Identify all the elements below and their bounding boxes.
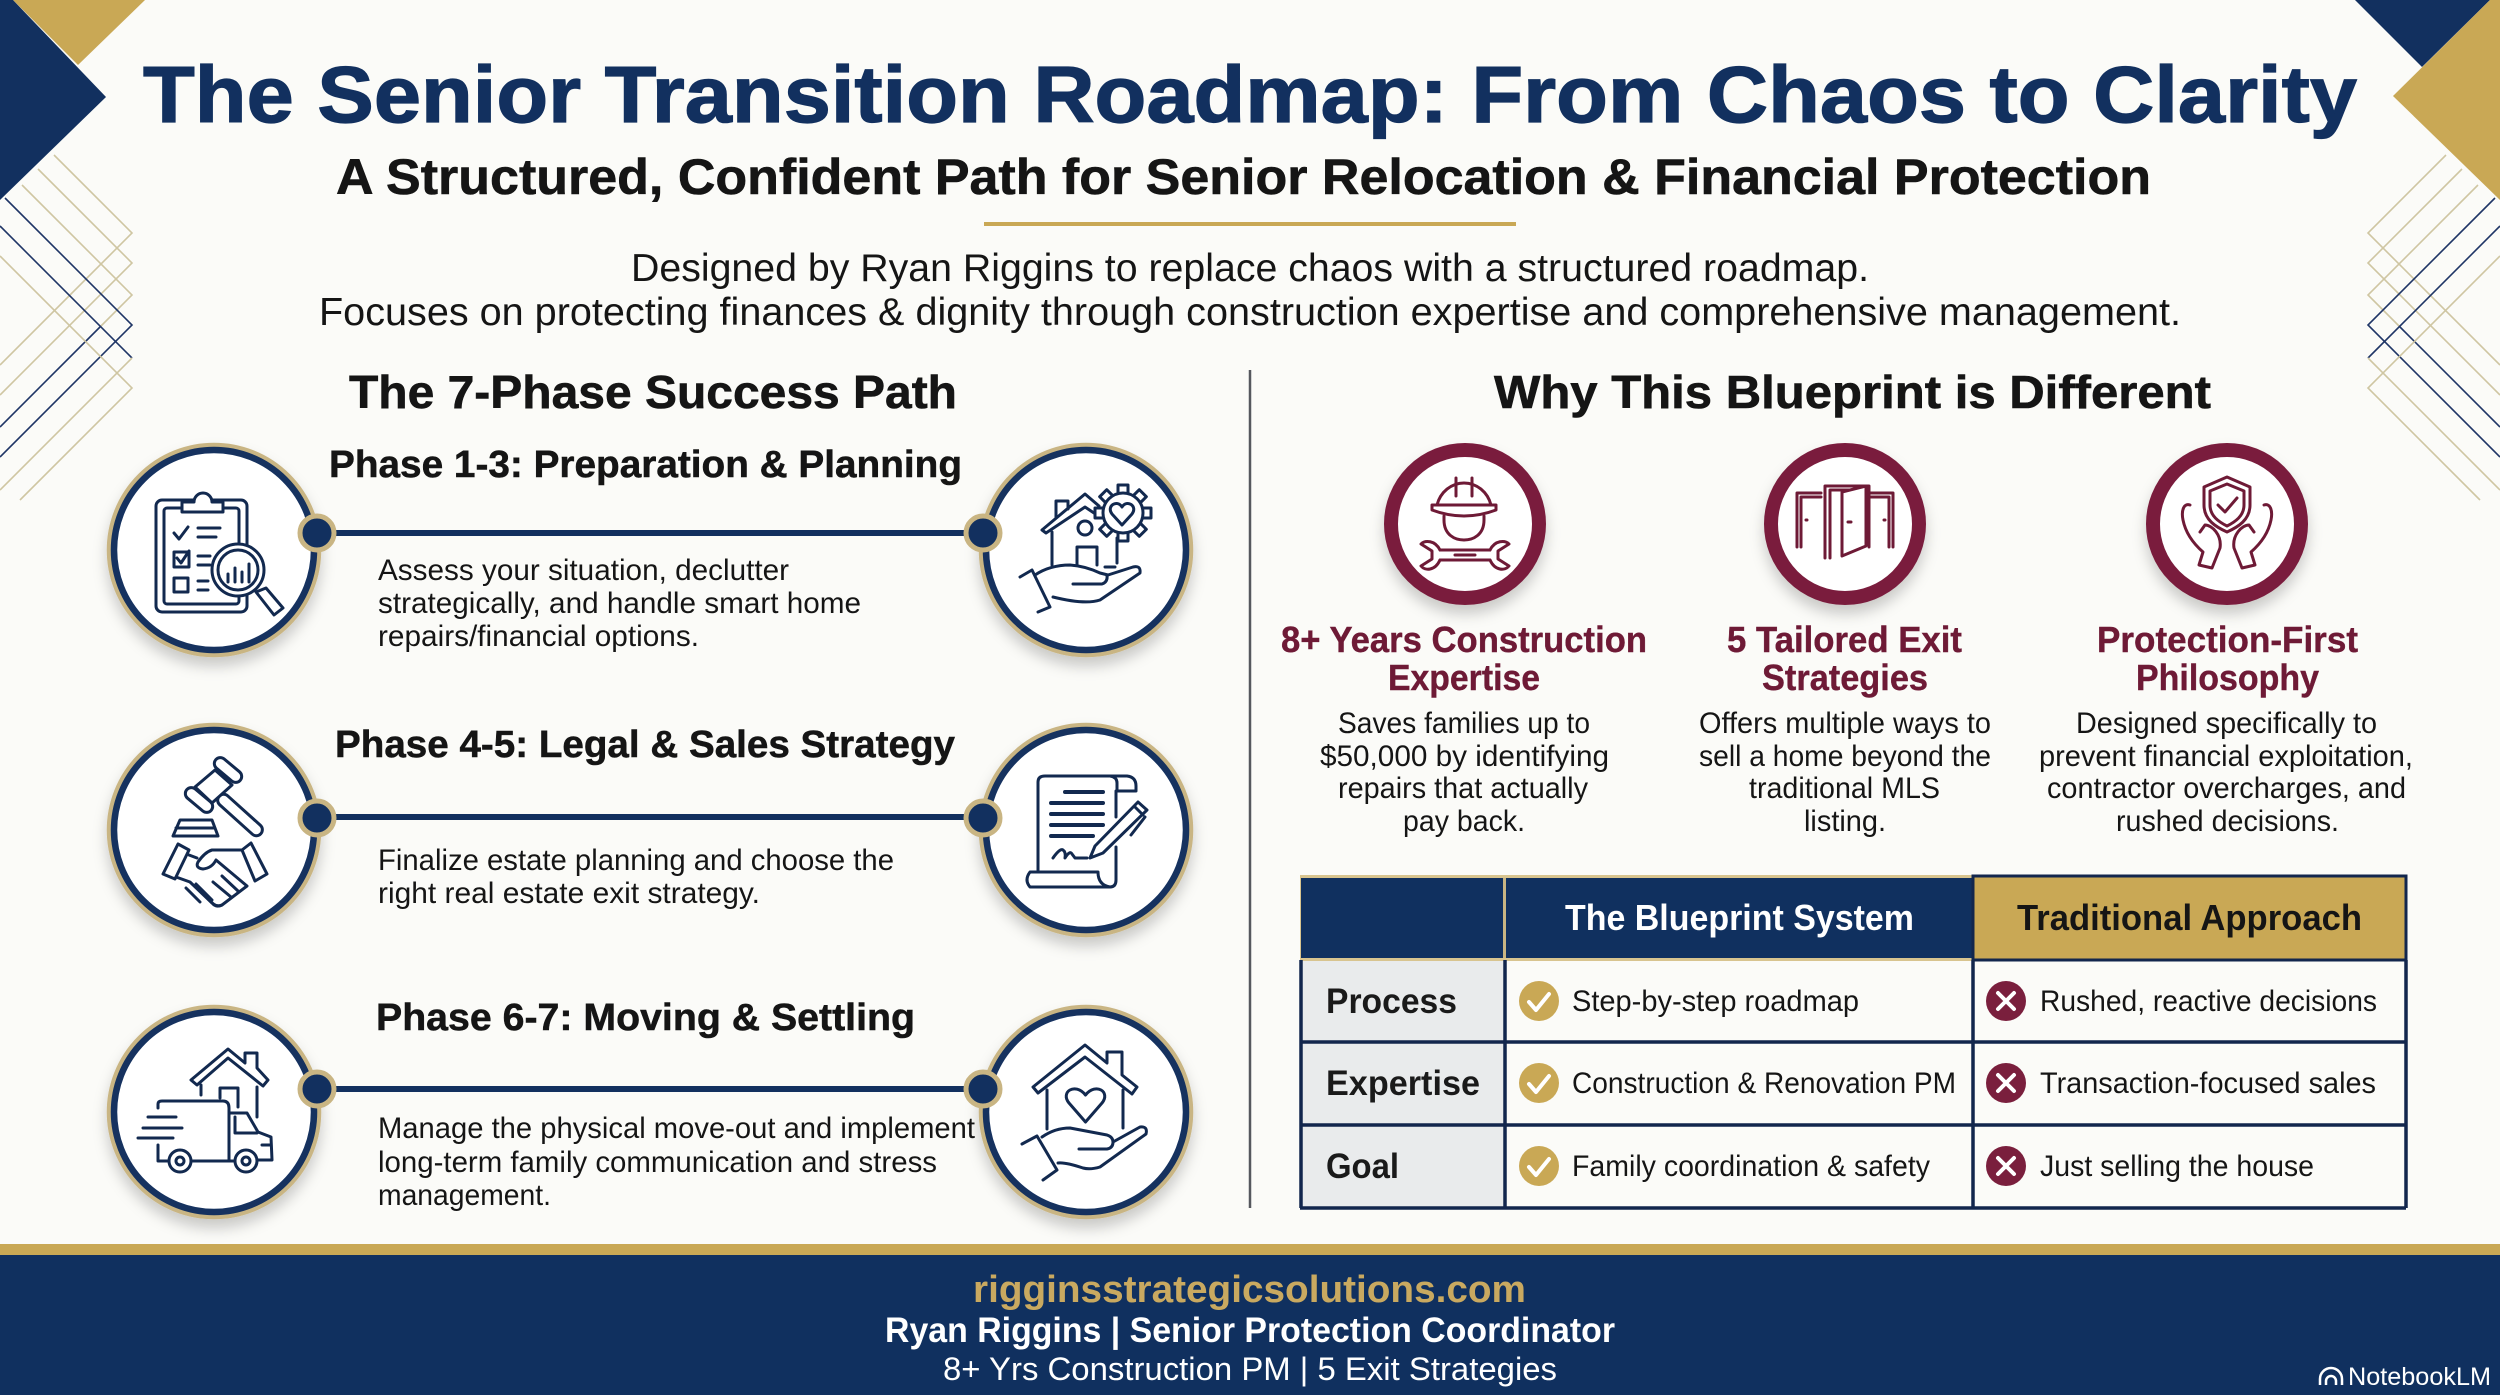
- icon: three doors: [1771, 450, 1919, 598]
- icon: shield in hands: [2153, 450, 2301, 598]
- gold title rule: [984, 222, 1516, 226]
- panel: phase 4-5: [109, 724, 1191, 935]
- card heading: Protection-First: [2097, 619, 2358, 660]
- row: goal: Goal: [1326, 1147, 1399, 1186]
- card text: prevent financial exploitation,: [2039, 740, 2413, 773]
- card text: [1320, 707, 1609, 838]
- phase 1-3 heading: Phase 1-3: Preparation & Planning: [329, 444, 962, 486]
- row: expertise: Transaction-focused sales: [2040, 1067, 2376, 1100]
- card text: rushed decisions.: [2116, 805, 2339, 838]
- card heading: [2097, 619, 2358, 698]
- phase 6-7 description: [378, 1112, 976, 1212]
- card heading: Expertise: [1388, 657, 1540, 698]
- comparison table: [1300, 875, 2406, 1208]
- card text: Designed specifically to: [2076, 707, 2377, 740]
- card heading: 8+ Years Construction: [1281, 619, 1647, 660]
- row: goal: Family coordination & safety: [1572, 1150, 1930, 1183]
- card text: contractor overcharges, and: [2047, 772, 2406, 805]
- row: expertise: Expertise: [1326, 1064, 1480, 1103]
- decoration: top-right corner shapes: [2355, 0, 2500, 500]
- panel: protection-first: [2039, 450, 2413, 838]
- card text: traditional MLS: [1749, 772, 1940, 805]
- footer: [0, 1244, 2500, 1395]
- heading: why different: Why This Blueprint is Different: [1494, 366, 2211, 418]
- table header: [1300, 875, 2406, 961]
- card heading: [1727, 619, 1962, 698]
- card text: sell a home beyond the: [1699, 740, 1991, 773]
- card heading: Philosophy: [2136, 657, 2319, 698]
- right icon: home, gear and hand: [981, 445, 1191, 655]
- right icon: house with heart in hand: [981, 1007, 1191, 1217]
- panel: phase 6-7: [109, 997, 1191, 1217]
- card text: listing.: [1804, 805, 1886, 838]
- card heading: 5 Tailored Exit: [1727, 619, 1962, 660]
- icon: hard hat and wrench: [1391, 450, 1539, 598]
- table grid: [1300, 960, 2406, 1208]
- intro text: [319, 247, 2181, 334]
- row: process: Step-by-step roadmap: [1572, 985, 1859, 1018]
- phase 4-5 heading: Phase 4-5: Legal & Sales Strategy: [335, 724, 955, 766]
- phase 1-3 description: strategically, and handle smart home: [378, 587, 861, 620]
- title: The Senior Transition Roadmap: From Chaos to Clarity: [143, 50, 2358, 139]
- column divider: [1249, 370, 1251, 1208]
- card heading: [1281, 619, 1647, 698]
- panel: phase 1-3: [109, 444, 1191, 655]
- card text: Offers multiple ways to: [1699, 707, 1991, 740]
- footer name and role: Ryan Riggins | Senior Protection Coordinator: [885, 1311, 1615, 1350]
- phase 4-5 description: Finalize estate planning and choose the: [378, 844, 894, 877]
- subtitle: A Structured, Confident Path for Senior Relocation & Financial Protection: [336, 149, 2151, 205]
- row: expertise: Construction & Renovation PM: [1572, 1067, 1956, 1100]
- row: goal: Just selling the house: [2040, 1150, 2314, 1183]
- left icon: clipboard with magnifier: [109, 445, 319, 655]
- footer credentials: 8+ Yrs Construction PM | 5 Exit Strategies: [943, 1351, 1557, 1387]
- intro text: Focuses on protecting finances & dignity through construction expertise and comprehensive management.: [319, 291, 2181, 334]
- panel: construction expertise: [1281, 450, 1647, 838]
- left icon: gavel and handshake: [109, 725, 319, 935]
- phase 6-7 heading: Phase 6-7: Moving & Settling: [376, 997, 915, 1039]
- phase 1-3 description: repairs/financial options.: [378, 620, 699, 653]
- phase 1-3 description: [378, 554, 861, 653]
- right icon: document and pen: [981, 725, 1191, 935]
- connector line with end dots: [300, 1072, 1000, 1106]
- phase 4-5 description: right real estate exit strategy.: [378, 877, 760, 910]
- card heading: Strategies: [1762, 657, 1928, 698]
- NotebookLM mark: NotebookLM: [2348, 1363, 2491, 1391]
- row: process: [1326, 981, 2377, 1021]
- phase 6-7 description: management.: [378, 1179, 551, 1212]
- left icon: moving truck and house: [109, 1007, 319, 1217]
- card text: $50,000 by identifying: [1320, 740, 1609, 773]
- row: expertise: [1326, 1063, 2376, 1103]
- card text: Saves families up to: [1338, 707, 1590, 740]
- card text: pay back.: [1403, 805, 1525, 838]
- card text: [1699, 707, 1991, 838]
- panel: exit strategies: [1699, 450, 1991, 838]
- row: goal: [1326, 1146, 2314, 1186]
- card text: repairs that actually: [1338, 772, 1588, 805]
- intro text: Designed by Ryan Riggins to replace chaos with a structured roadmap.: [631, 247, 1869, 290]
- table header: Traditional Approach: [2017, 897, 2362, 938]
- footer website: rigginsstrategicsolutions.com: [973, 1269, 1526, 1311]
- decoration: top-left corner shapes: [0, 0, 145, 500]
- phase 6-7 description: long-term family communication and stress: [378, 1146, 937, 1179]
- heading: 7-phase path: The 7-Phase Success Path: [349, 366, 957, 418]
- row: process: Rushed, reactive decisions: [2040, 985, 2377, 1018]
- card text: [2039, 707, 2413, 838]
- connector line with end dots: [300, 516, 1000, 550]
- connector line with end dots: [300, 801, 1000, 835]
- phase 6-7 description: Manage the physical move-out and implement: [378, 1112, 976, 1145]
- phase 1-3 description: Assess your situation, declutter: [378, 554, 789, 587]
- phase 4-5 description: [378, 844, 894, 910]
- table header: The Blueprint System: [1565, 897, 1914, 938]
- row: process: Process: [1326, 982, 1457, 1021]
